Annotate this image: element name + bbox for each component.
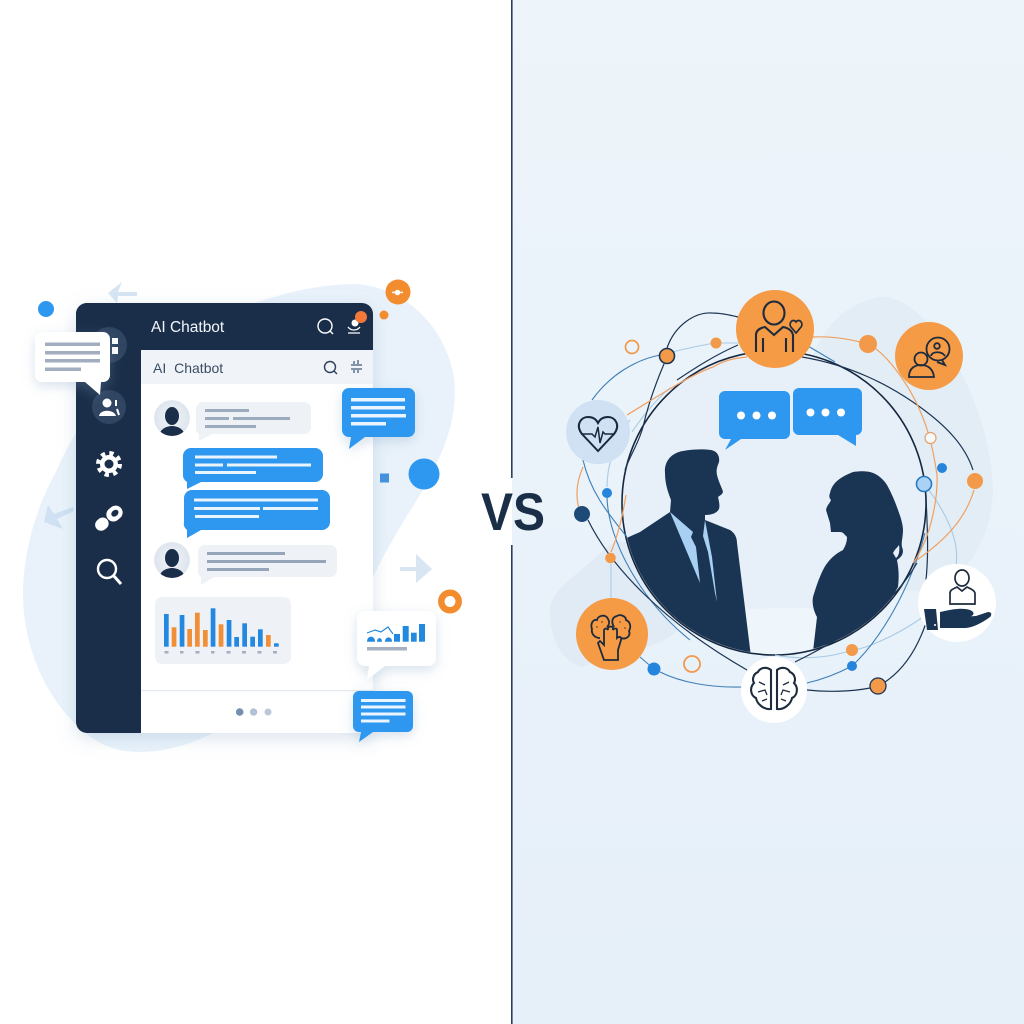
icon: heart with pulse bbox=[566, 400, 630, 464]
network nodes bbox=[574, 335, 983, 694]
orange node with dots bbox=[386, 280, 410, 304]
sidebar icon: users second bbox=[92, 390, 126, 424]
message bubble: user one bbox=[196, 402, 311, 441]
chatbot window bbox=[76, 303, 373, 733]
callout: blue bubble top right bbox=[342, 388, 415, 449]
VS label: VS bbox=[481, 483, 545, 542]
icon: person with heart bbox=[736, 290, 814, 368]
callout: white bubble top left bbox=[35, 332, 110, 395]
blue arcs bbox=[583, 346, 925, 687]
background blob bbox=[23, 284, 455, 752]
sub header title: AI Chatbot bbox=[153, 360, 223, 376]
center divider bbox=[511, 0, 513, 1024]
decorative arrow: right bbox=[400, 554, 432, 583]
shirt collar left bbox=[670, 512, 700, 583]
light floor bbox=[620, 608, 960, 692]
speech bubble: left bbox=[719, 391, 790, 450]
icon: header search bbox=[318, 319, 333, 334]
left sidebar bbox=[76, 303, 141, 733]
sidebar icon: search bbox=[98, 560, 121, 584]
window frame bbox=[76, 303, 373, 733]
axis ticks bbox=[164, 651, 277, 654]
icon: caring hand with person bbox=[918, 564, 996, 642]
sidebar icon: pill bbox=[92, 503, 126, 534]
bars bbox=[164, 608, 279, 647]
man silhouette bbox=[627, 449, 750, 652]
top header bar bbox=[76, 303, 373, 350]
shirt collar right bbox=[703, 520, 717, 602]
message bubble: bot one bbox=[183, 448, 323, 489]
pagination dots bbox=[236, 708, 272, 716]
inner circle fill bbox=[623, 352, 925, 654]
panel: human connection side bbox=[550, 290, 996, 723]
avatar: first message bbox=[154, 400, 190, 436]
header title: AI Chatbot bbox=[151, 319, 225, 336]
avatar: second message bbox=[154, 542, 190, 578]
icon: people consult bbox=[895, 322, 963, 390]
decorative arrow: top left bbox=[108, 282, 137, 303]
panel: AI chatbot side bbox=[23, 280, 459, 752]
connection network bbox=[577, 313, 974, 691]
icon: brain bbox=[741, 657, 807, 723]
sub header bar bbox=[141, 350, 373, 384]
icon: sub header search bbox=[324, 362, 337, 374]
footer line bbox=[141, 690, 373, 691]
callout: blue bubble bottom bbox=[353, 691, 413, 742]
panel: right pale blue background bbox=[512, 0, 1024, 1024]
blue square bbox=[380, 474, 389, 482]
icon: sub header filter bbox=[351, 360, 362, 373]
sidebar icon: gear bbox=[98, 454, 120, 474]
orange arcs bbox=[577, 337, 974, 563]
woman hair highlight bbox=[893, 545, 899, 558]
navy arcs bbox=[588, 313, 973, 691]
message bubble: user two bbox=[198, 545, 337, 585]
blue dot bbox=[38, 301, 54, 317]
icon: hand with brain bbox=[576, 598, 648, 670]
small orange dot bbox=[380, 310, 388, 320]
icon: header notification bbox=[348, 311, 367, 333]
light blue arcs bbox=[607, 343, 957, 658]
silhouettes bbox=[627, 449, 903, 652]
blob: upper right bbox=[802, 297, 993, 592]
orange ring bbox=[441, 593, 459, 610]
callout: chart bubble bbox=[357, 611, 436, 680]
sidebar icon: users top bbox=[91, 327, 127, 363]
blob: lower left bbox=[550, 542, 677, 667]
decorative arrow: left diagonal bbox=[44, 505, 74, 529]
speech bubble: right bbox=[793, 388, 862, 446]
bar chart card bbox=[155, 597, 291, 664]
panel: left white background bbox=[0, 0, 512, 1024]
message bubble: bot two bbox=[184, 490, 330, 538]
main circle outline bbox=[622, 351, 926, 655]
blue circle bbox=[408, 458, 440, 490]
woman silhouette bbox=[812, 471, 903, 660]
